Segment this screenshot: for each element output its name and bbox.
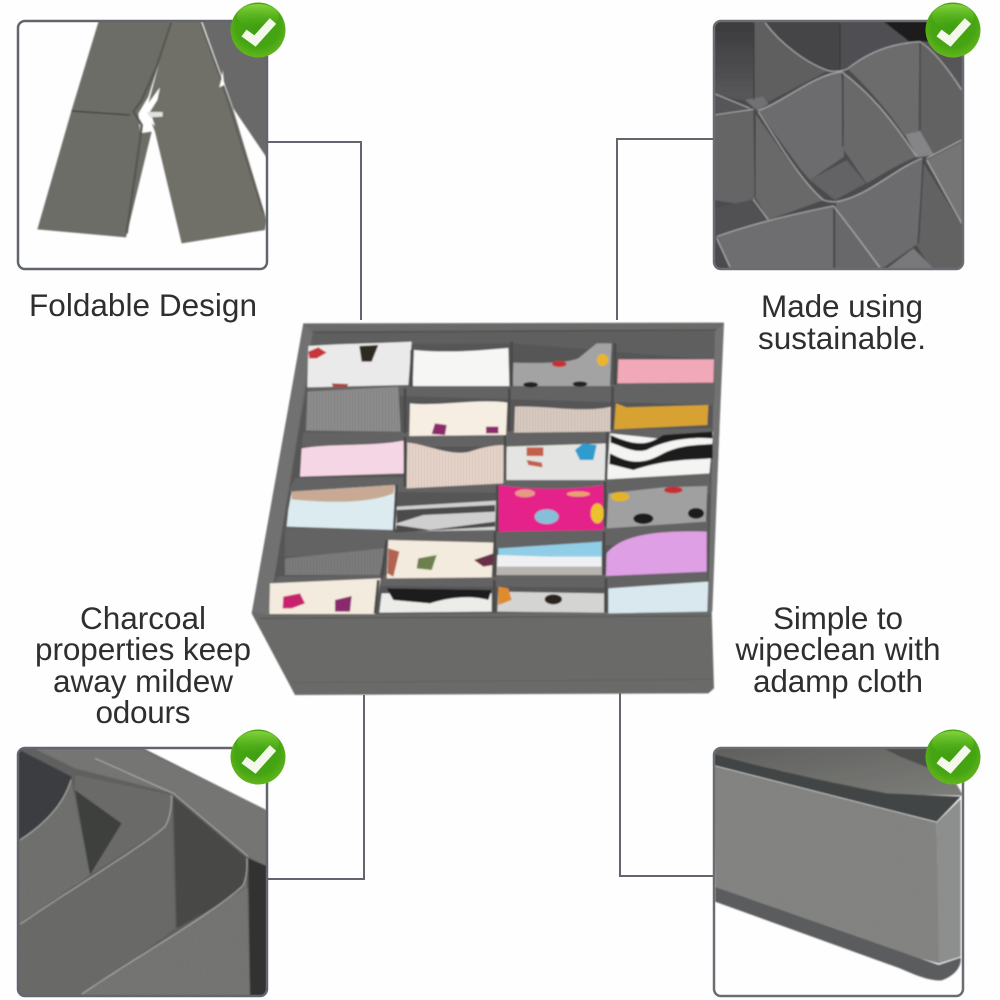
- panel: charcoal fabric photo: [15, 745, 268, 998]
- panel: honeycomb compartments photo: [710, 17, 968, 273]
- socks row 6: [269, 578, 708, 614]
- label: made using sustainable: Made using: [761, 288, 923, 324]
- badge: check wipe clean: [926, 730, 980, 784]
- socks row 2: [306, 387, 708, 436]
- label: simple to wipe clean: [734, 600, 940, 699]
- badge: check foldable design: [230, 2, 286, 58]
- label: simple to wipe clean: adamp cloth: [753, 663, 923, 699]
- label: simple to wipe clean: wipeclean with: [734, 631, 940, 667]
- badge: check sustainable: [926, 2, 980, 58]
- connector: wipe clean to organizer: [620, 693, 714, 876]
- organizer box with socks: [252, 323, 724, 695]
- label: foldable design: Foldable Design: [29, 287, 257, 323]
- label: charcoal properties: odours: [96, 694, 190, 730]
- connector: charcoal to organizer: [267, 695, 364, 879]
- label: charcoal properties: Charcoal: [80, 600, 206, 636]
- compartment dividers: [375, 342, 615, 613]
- row dividers: [272, 383, 715, 588]
- connector: sustainable to organizer: [617, 139, 714, 320]
- socks row 3: [300, 432, 713, 488]
- label: charcoal properties: [35, 600, 251, 730]
- socks row 5: [285, 531, 707, 578]
- label: simple to wipe clean: Simple to: [773, 600, 903, 636]
- label: made using sustainable: sustainable.: [758, 320, 926, 356]
- label: charcoal properties: properties keep: [35, 631, 251, 667]
- label: charcoal properties: away mildew: [53, 663, 233, 699]
- badge: check charcoal: [230, 730, 286, 784]
- socks row 4: [287, 485, 707, 533]
- panel: wipe clean side photo: [713, 745, 963, 996]
- panel: foldable design photo: [18, 20, 268, 269]
- label: made using sustainable: [758, 288, 926, 356]
- box body: [252, 323, 724, 695]
- socks row 1: [307, 342, 714, 387]
- connector: foldable design to organizer: [267, 142, 361, 320]
